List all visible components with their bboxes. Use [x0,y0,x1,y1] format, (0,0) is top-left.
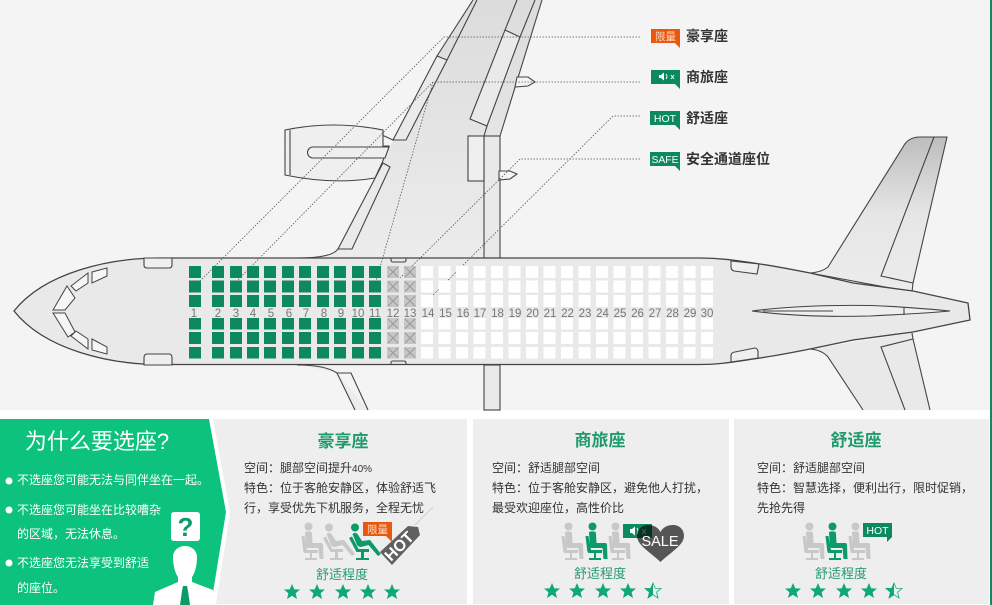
heading: premium seat: 豪享座 [318,431,368,451]
row numbers: 12 [387,308,399,320]
description: comfort seat: 先抢先得 [757,500,805,515]
row numbers: 6 [286,308,292,320]
description: comfort seat: 空间：舒适腿部空间 [757,460,865,475]
legend [650,28,770,171]
row numbers: 8 [321,308,327,320]
seats: exit rows 12-13 [387,266,416,358]
badge: limited [363,522,392,542]
tag: sale heart: SALE [641,534,679,550]
row numbers: 3 [233,308,239,320]
fuselage door marks [144,258,759,365]
description: premium seat [244,460,436,515]
fuselage [14,258,970,364]
heading: comfort seat: 舒适座 [830,430,882,450]
panel: premium seat [213,419,467,604]
row numbers: 5 [268,308,274,320]
legend: exit row seat: 安全通道座位 [686,151,770,167]
heading: business seat: 商旅座 [574,430,626,450]
row numbers: 1 [191,308,197,320]
reason list: 不选座您可能无法与同伴坐在一起。 [17,472,209,487]
reason list [6,472,209,595]
reason list: 的座位。 [17,580,65,595]
description: premium seat: 特色：位于客舱安静区，体验舒适飞 [244,480,436,495]
legend: comfort seat: 舒适座 [686,110,728,126]
legend: premium seat [651,28,728,48]
description: premium seat: 空间：腿部空间提升40% [244,460,372,475]
tag: sale heart [637,525,684,562]
panel: comfort seat [734,419,989,604]
row numbers: 15 [439,308,452,320]
row numbers: 22 [561,308,574,320]
row numbers: 26 [631,308,644,320]
tail lower stabilizer [810,333,930,410]
dotted leader lines [200,37,640,358]
reason list: 不选座您无法享受到舒适 [17,555,149,570]
comfort label: 舒适程度 [574,566,626,581]
upper wing [297,0,542,258]
row numbers: 2 [215,308,221,320]
description: business seat: 特色：位于客舱安静区，避免他人打扰， [492,480,708,495]
description: comfort seat: 特色：智慧选择，便利出行，限时促销， [757,480,973,495]
legend: comfort seat: HOT [654,113,677,125]
description: business seat: 空间：舒适腿部空间 [492,460,600,475]
legend: exit row seat [650,151,770,171]
right green edge line [990,0,992,605]
row numbers [191,308,713,320]
reason list: 的区域，无法休息。 [17,526,125,541]
icon: person silhouette [153,546,216,605]
tag: hot [380,507,433,565]
airplane diagram [14,0,970,410]
engine [285,125,389,181]
row numbers: 25 [614,308,626,320]
icon: question mark box: ? [178,512,193,542]
heading: why choose seats: 为什么要选座? [25,429,169,454]
row numbers: 13 [404,308,416,320]
tail elevator shape [752,305,950,316]
tail upper stabilizer [810,137,947,292]
icon: seat row [562,522,630,560]
legend: comfort seat [650,110,728,130]
row numbers: 10 [352,308,364,320]
star rating: five stars [284,584,400,599]
row numbers: 4 [250,308,257,320]
description: business seat: 最受欢迎座位，高性价比 [492,500,624,515]
description: premium seat: 行，享受优先下机服务，全程无忧 [244,500,424,515]
badge: limited: 限量 [367,524,388,536]
row numbers: 18 [491,308,504,320]
panel: why choose seats [0,419,226,605]
row numbers: 7 [303,308,309,320]
row numbers: 19 [509,308,521,320]
diagram background [0,0,990,410]
row numbers: 23 [579,308,591,320]
row numbers: 21 [544,308,556,320]
star rating: four and a half [544,583,661,598]
row numbers: 17 [474,308,486,320]
description: business seat [492,460,708,515]
icon: question mark box [171,512,200,542]
seats: premium green rows 1-11 [189,266,381,358]
panel: business seat [473,419,729,604]
legend: premium seat: 豪享座 [686,28,728,44]
tag: hot: HOT [382,529,418,565]
row numbers: 14 [422,308,435,320]
row numbers: 9 [338,308,344,320]
icon: seat row [802,522,870,560]
row numbers: 24 [596,308,609,320]
cockpit windows [53,268,107,354]
row numbers: 28 [666,308,679,320]
badge: hot: HOT [866,525,889,537]
legend: exit row seat: SAFE [652,154,678,166]
legend: business seat [651,69,728,89]
row numbers: 20 [526,308,539,320]
comfort label: 舒适程度 [815,566,867,581]
reason list: 不选座您可能坐在比较嘈杂 [17,502,161,517]
legend: business seat: 商旅座 [686,69,728,85]
description: comfort seat [757,460,973,515]
row numbers: 16 [457,308,469,320]
row numbers: 29 [684,308,696,320]
row numbers: 27 [649,308,661,320]
row numbers: 30 [701,308,713,320]
comfort label: 舒适程度 [316,567,368,582]
row numbers: 11 [369,308,381,320]
star rating: four and a half [785,583,902,598]
legend: premium seat: 限量 [655,31,676,43]
badge: quiet [623,524,652,538]
lower wing [297,364,500,410]
badge: hot [863,523,892,542]
icon: seat row [302,522,381,560]
seats: white rows 14-30 [421,266,713,358]
